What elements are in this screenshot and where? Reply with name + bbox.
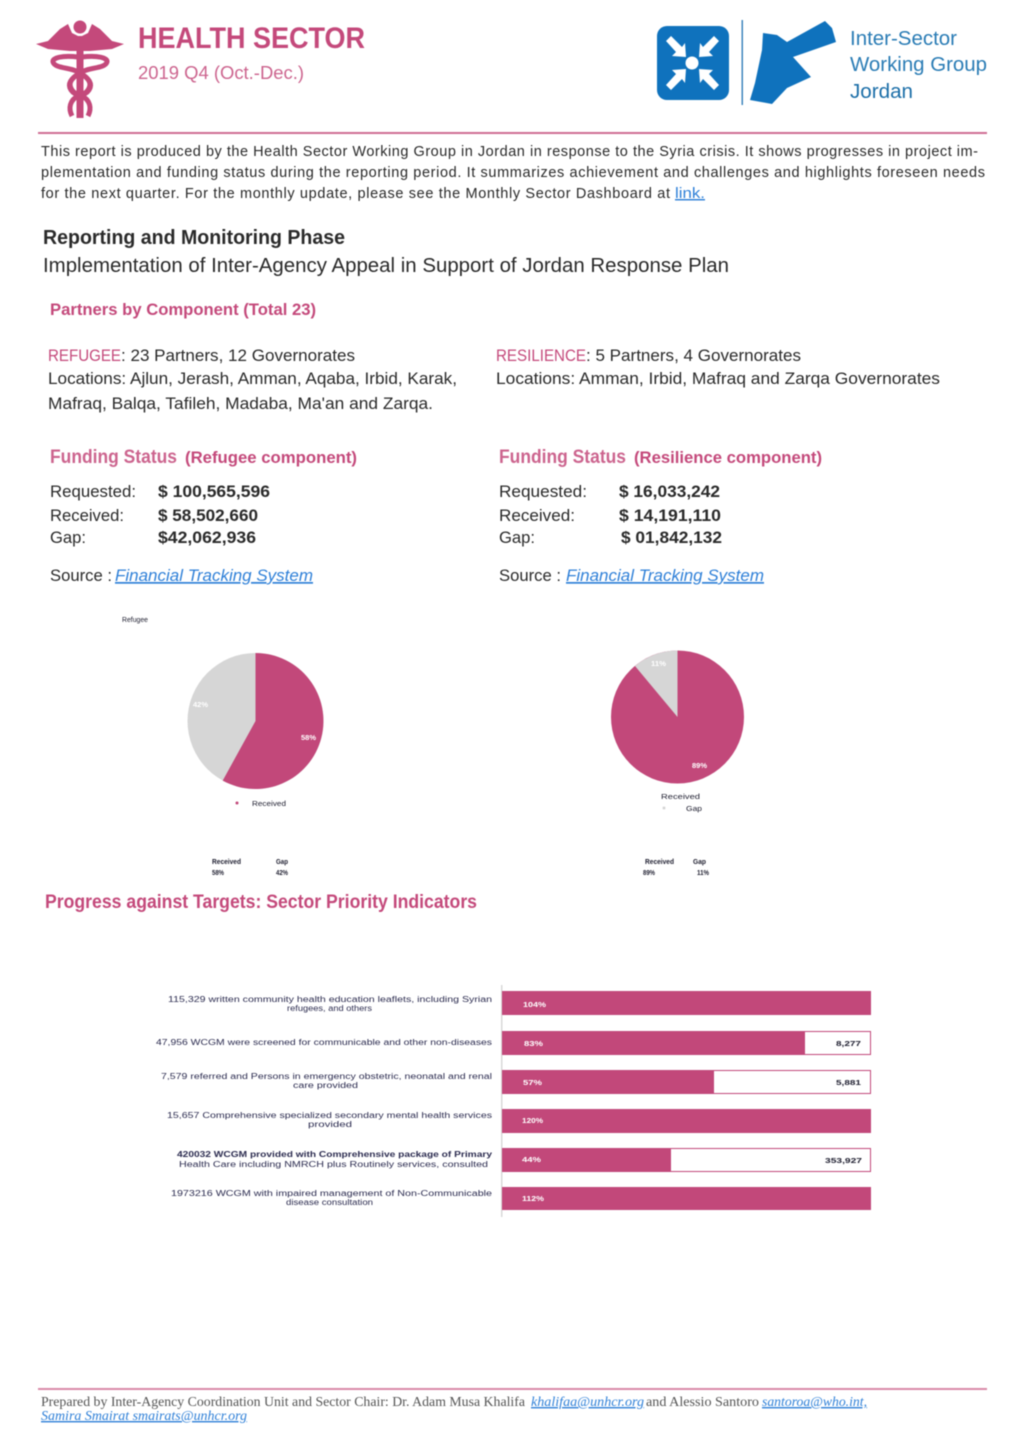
panel: resilience partners <box>496 347 940 388</box>
panel: funding status refugee: Financial Tracking System <box>115 566 313 585</box>
chart: resilience funding pie <box>611 650 744 877</box>
indicator row 6: 112% <box>522 1196 545 1203</box>
panel: funding status refugee: (Refugee component) <box>185 448 357 467</box>
indicator row 2: 8,277 <box>836 1041 861 1048</box>
panel: resilience partners: Locations: Amman, Irbid, Mafraq and Zarqa Governorates <box>496 370 940 388</box>
indicator row 4: 120% <box>522 1118 544 1125</box>
footer: and Alessio Santoro <box>646 1395 759 1410</box>
intro text: for the next quarter. For the monthly update, please see the Monthly Sector Dashboard at <box>41 186 670 202</box>
indicator row 4 <box>167 1109 871 1133</box>
chart: resilience funding pie: Received <box>645 859 674 866</box>
subtitle: 2019 Q4 (Oct.-Dec.) <box>138 63 304 83</box>
intro text <box>41 144 985 202</box>
indicator row 5: Health Care including NMRCH plus Routinely services, consulted <box>179 1160 488 1169</box>
logo text <box>850 28 987 103</box>
indicator row 1: refugees, and others <box>287 1004 372 1013</box>
panel: refugee partners: Locations: Ajlun, Jerash, Amman, Aqaba, Irbid, Karak, <box>48 370 457 388</box>
panel: funding status resilience <box>499 447 822 585</box>
heading: reporting and monitoring phase: Implementation of Inter-Agency Appeal in Support of Jordan Response Plan <box>43 255 729 277</box>
footer <box>41 1395 867 1424</box>
chart: refugee funding pie: 42% <box>276 870 289 877</box>
chart: refugee funding pie: 58% <box>301 735 317 742</box>
panel: funding status resilience: Financial Tracking System <box>566 566 764 585</box>
indicator row 1: 115,329 written community health education leaflets, including Syrian <box>168 995 492 1004</box>
footer: Samira Smairat smairats@unhcr.org <box>41 1409 247 1424</box>
chart: resilience funding pie: Gap <box>693 859 706 866</box>
intro text: This report is produced by the Health Sector Working Group in Jordan in response to the Syria crisis. It shows progresses in project im- <box>41 144 978 160</box>
panel: refugee partners: Mafraq, Balqa, Tafileh, Madaba, Ma'an and Zarqa. <box>48 395 433 413</box>
heading: reporting and monitoring phase <box>43 227 729 277</box>
panel: funding status refugee <box>50 447 357 585</box>
indicator row 2 <box>156 1031 870 1055</box>
chart: resilience funding pie: 11% <box>651 661 667 668</box>
chart: resilience funding pie: 89% <box>643 870 656 877</box>
indicator row 1 <box>168 991 871 1015</box>
panel: resilience partners: : 5 Partners, 4 Governorates <box>586 347 801 365</box>
indicator row 5: 353,927 <box>825 1158 862 1165</box>
indicator row 2: 47,956 WCGM were screened for communicable and other non-diseases <box>156 1038 492 1047</box>
panel: funding status refugee: $ 58,502,660 <box>158 506 258 525</box>
chart: resilience funding pie: Gap <box>686 806 702 813</box>
indicator row 1: 104% <box>523 1002 547 1009</box>
chart: refugee funding pie <box>122 617 324 877</box>
indicator row 4: 15,657 Comprehensive specialized secondary mental health services <box>167 1111 492 1120</box>
panel: funding status resilience: Funding Status <box>499 447 626 468</box>
panel: funding status resilience: $ 01,842,132 <box>621 528 722 547</box>
panel: funding status refugee: Received: <box>50 506 124 525</box>
panel: resilience partners: RESILIENCE <box>496 347 586 365</box>
chart: refugee funding pie: Gap <box>276 859 288 866</box>
indicator row 3: 5,881 <box>836 1080 861 1087</box>
footer: khalifaa@unhcr.org <box>531 1395 644 1410</box>
indicator row 2: 83% <box>524 1041 544 1048</box>
footer: Prepared by Inter-Agency Coordination Unit and Sector Chair: Dr. Adam Musa Khalifa <box>41 1395 526 1410</box>
panel: funding status refugee: Requested: <box>50 482 136 501</box>
panel: funding status refugee: $ 100,565,596 <box>158 482 270 501</box>
chart: sector priority indicators <box>156 985 871 1217</box>
icon: map of Jordan <box>750 21 836 104</box>
chart: resilience funding pie: 11% <box>697 870 710 877</box>
icon: arrows converging <box>657 26 729 100</box>
indicator row 6: disease consultation <box>286 1198 373 1207</box>
heading: progress against targets: Progress against Targets: Sector Priority Indicators <box>45 892 477 913</box>
chart: refugee funding pie: Received <box>252 801 286 808</box>
indicator row 5: 44% <box>522 1157 542 1164</box>
indicator row 3: care provided <box>293 1081 358 1090</box>
panel: refugee partners: REFUGEE <box>48 347 121 365</box>
panel: funding status refugee: Gap: <box>50 528 86 547</box>
title: HEALTH SECTOR <box>138 22 365 55</box>
indicator row 4: provided <box>308 1120 352 1129</box>
panel: funding status resilience: Source : <box>499 566 561 585</box>
footer: santoroa@who.int, <box>762 1395 867 1410</box>
chart: refugee funding pie: Received <box>212 859 241 866</box>
logo text: Working Group <box>850 54 987 76</box>
logo: Inter-Sector Working Group Jordan <box>657 20 987 105</box>
indicator row 3 <box>161 1070 870 1094</box>
intro text: plementation and funding status during the reporting period. It summarizes achievement and challenges and highlights foreseen needs <box>41 165 985 181</box>
heading: partners by component: Partners by Component (Total 23) <box>50 300 316 319</box>
panel: funding status resilience: (Resilience component) <box>634 448 822 467</box>
icon: caduceus <box>36 20 124 118</box>
panel: refugee partners <box>48 347 457 413</box>
indicator row 5 <box>177 1148 870 1172</box>
chart: resilience funding pie: 89% <box>692 763 708 770</box>
indicator row 3: 57% <box>523 1080 543 1087</box>
panel: funding status refugee: Funding Status <box>50 447 177 468</box>
chart: refugee funding pie: 58% <box>212 870 225 877</box>
panel: refugee partners: : 23 Partners, 12 Governorates <box>121 347 355 365</box>
intro text: link. <box>675 186 705 202</box>
logo text: Inter-Sector <box>850 28 957 50</box>
chart: refugee funding pie: Refugee <box>122 617 148 624</box>
panel: funding status refugee: $42,062,936 <box>158 528 256 547</box>
panel: funding status resilience: Gap: <box>499 528 535 547</box>
panel: funding status refugee: Source : <box>50 566 112 585</box>
indicator row 3: 7,579 referred and Persons in emergency obstetric, neonatal and renal <box>161 1072 492 1081</box>
chart: refugee funding pie: 42% <box>193 702 209 709</box>
panel: funding status resilience: $ 14,191,110 <box>619 506 721 525</box>
indicator row 5: 420032 WCGM provided with Comprehensive package of Primary <box>177 1150 493 1159</box>
chart: resilience funding pie: Received <box>661 794 700 801</box>
heading: reporting and monitoring phase: Reporting and Monitoring Phase <box>43 227 345 249</box>
indicator row 6 <box>171 1187 871 1210</box>
panel: funding status resilience: Received: <box>499 506 575 525</box>
panel: funding status resilience: $ 16,033,242 <box>619 482 720 501</box>
panel: funding status resilience: Requested: <box>499 482 587 501</box>
logo text: Jordan <box>850 81 913 103</box>
indicator row 6: 1973216 WCGM with impaired management of Non-Communicable <box>171 1189 493 1198</box>
